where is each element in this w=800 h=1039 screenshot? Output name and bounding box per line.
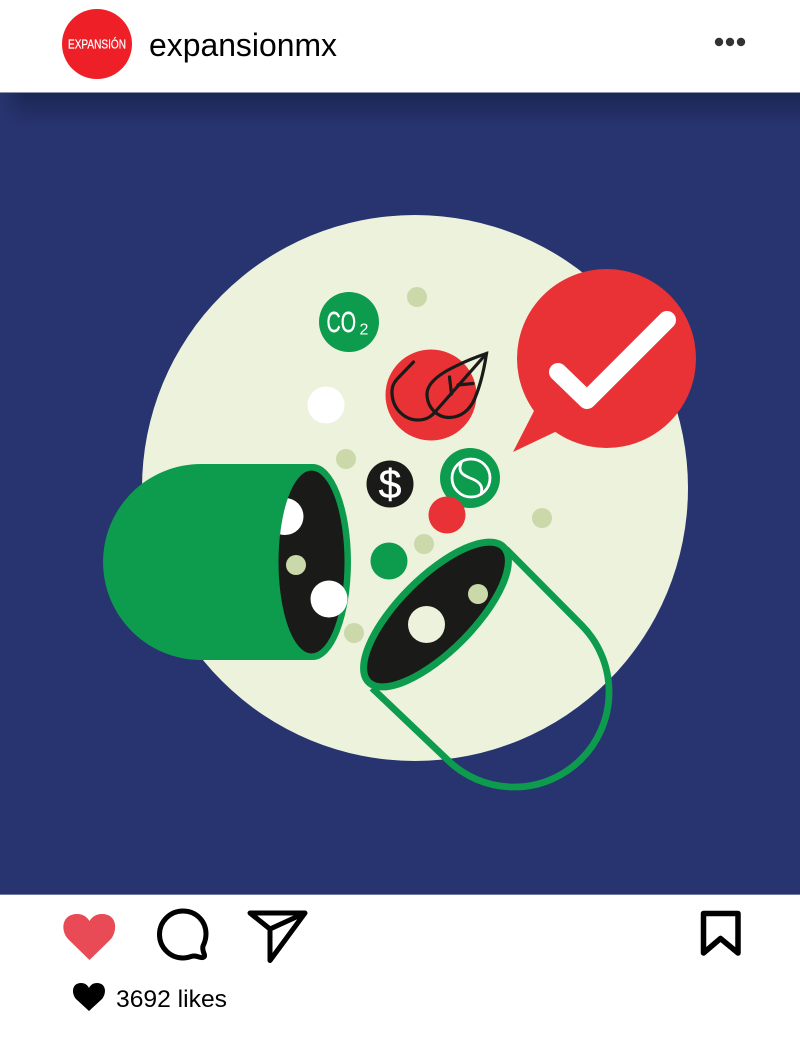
icon: CO2 badge: 2 <box>360 322 368 338</box>
speech bubble with check mark <box>513 269 696 452</box>
red particle <box>428 496 466 534</box>
icon: dollar badge: $ <box>379 461 402 507</box>
cream circle backdrop <box>142 215 688 761</box>
brand logo <box>62 9 132 79</box>
left green capsule half <box>103 464 351 660</box>
icon: small heart <box>73 983 105 1011</box>
icon: dollar badge <box>366 460 414 508</box>
account name: expansionmx <box>149 27 337 63</box>
brand logo: EXPANSIÓN <box>68 36 126 52</box>
icon: like heart <box>63 914 115 960</box>
decorative pill particles <box>308 287 552 643</box>
icon: S ring badge <box>440 448 500 508</box>
likes label: 3692 likes <box>116 986 227 1013</box>
icon: more options <box>715 38 745 46</box>
icon: leaf on red circle <box>386 350 486 440</box>
icon: CO2 badge <box>319 292 379 352</box>
illustration panel <box>0 92 800 895</box>
icon: bookmark <box>704 914 738 953</box>
icon: CO2 badge: CO <box>326 307 356 339</box>
icon: comment bubble <box>160 911 206 958</box>
icon: share paper plane <box>250 913 305 960</box>
action bar <box>63 911 738 1013</box>
header bar <box>62 9 745 79</box>
likes count <box>73 983 227 1013</box>
right outlined capsule half <box>342 521 609 787</box>
